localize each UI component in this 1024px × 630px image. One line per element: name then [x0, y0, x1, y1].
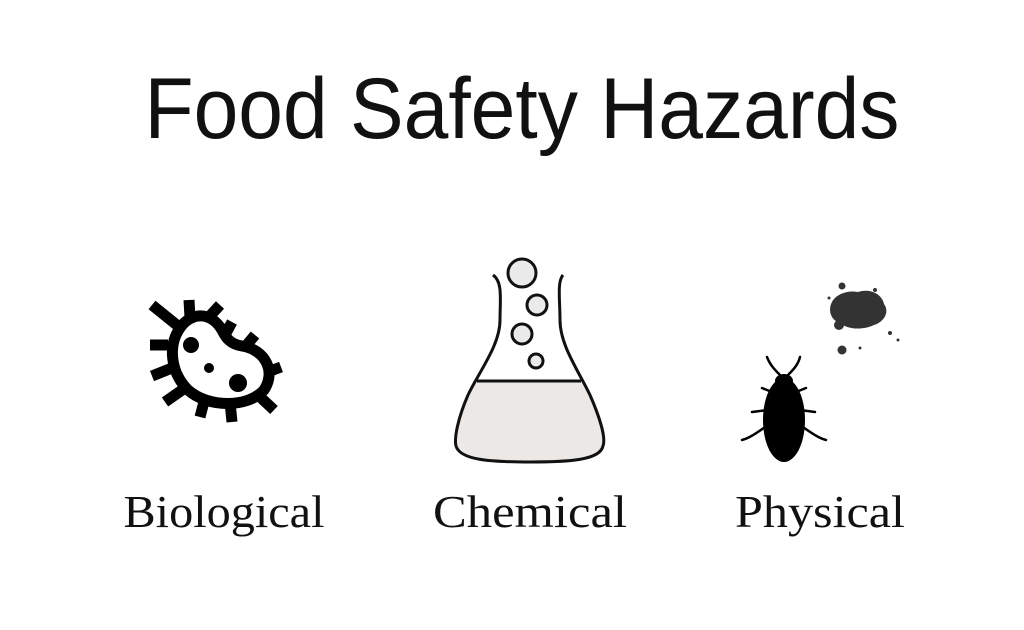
icon: bacterium — [150, 300, 281, 422]
icon: splat — [828, 282, 900, 354]
label: Physical: Physical — [735, 486, 905, 537]
label: Chemical: Chemical — [433, 486, 627, 537]
icon: flask — [456, 259, 604, 462]
icon: cockroach — [742, 357, 826, 462]
label: Biological: Biological — [124, 486, 324, 537]
title: Food Safety Hazards — [144, 61, 900, 157]
